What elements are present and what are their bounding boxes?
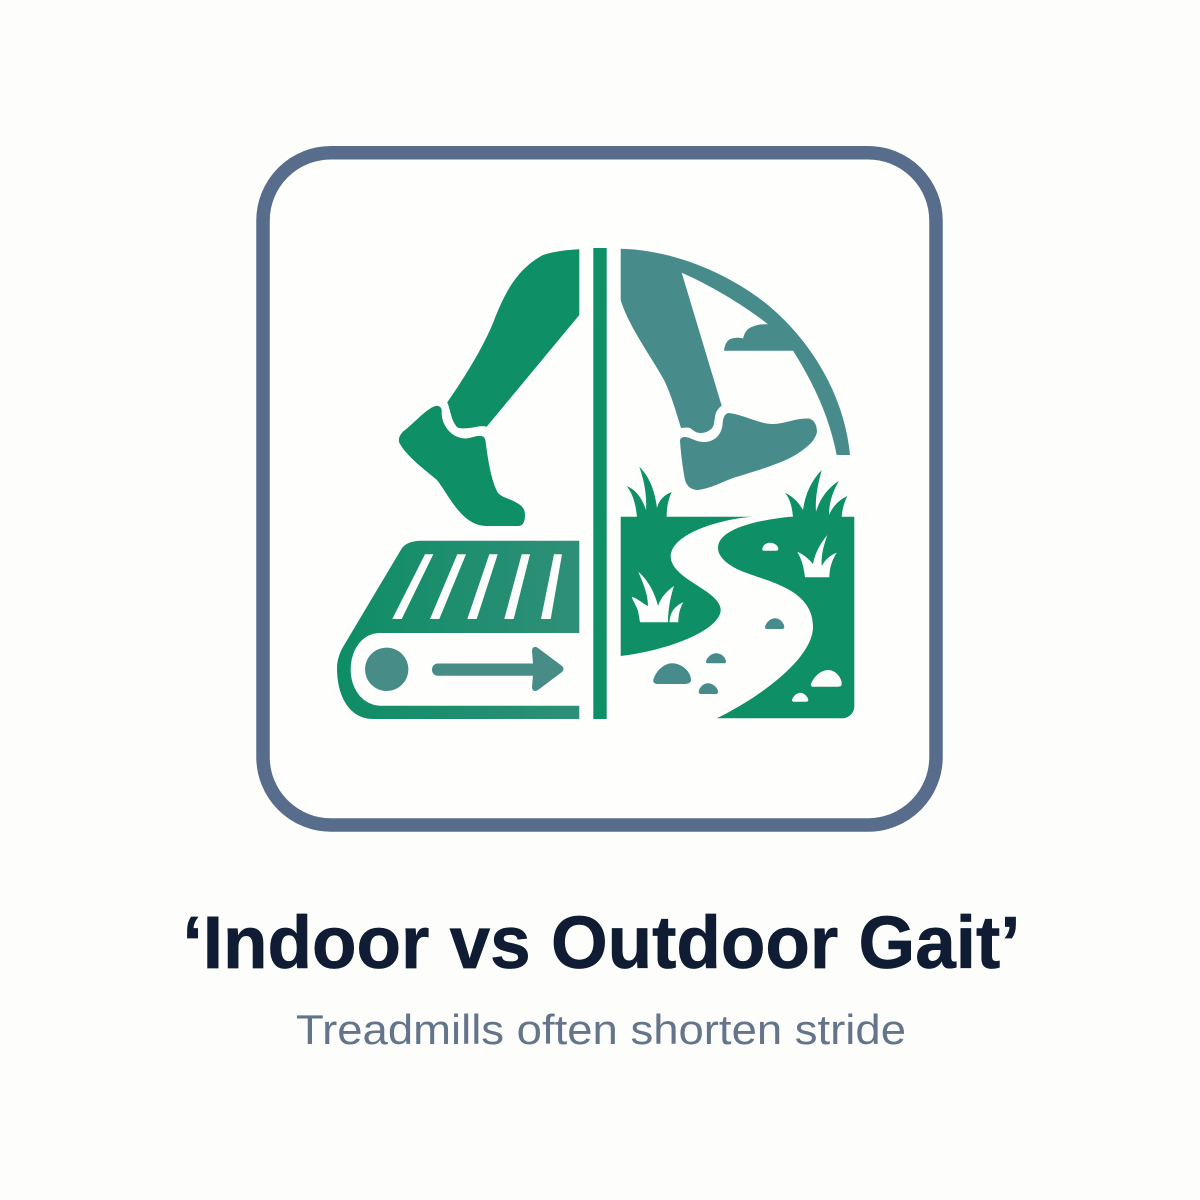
treadmill slats xyxy=(392,554,562,619)
teal stones xyxy=(653,618,784,694)
indoor foot xyxy=(399,406,525,526)
outdoor sky arc and leg xyxy=(621,249,850,455)
grass tuft top left xyxy=(627,467,672,518)
title: ‘Indoor vs Outdoor Gait’ xyxy=(182,901,1020,984)
treadmill roller xyxy=(365,648,408,691)
icon frame xyxy=(263,153,936,825)
white grass tuft left xyxy=(632,572,683,622)
outdoor foot xyxy=(680,413,817,490)
treadmill belt xyxy=(337,541,579,719)
subtitle: Treadmills often shorten stride xyxy=(296,1006,906,1053)
centre divider xyxy=(593,248,607,719)
grass tuft top right xyxy=(785,470,847,518)
white grass tuft right xyxy=(797,535,837,577)
indoor leg xyxy=(447,249,579,428)
right grass block xyxy=(717,517,854,718)
icon: indoor vs outdoor gait xyxy=(337,248,854,719)
left grass block xyxy=(621,517,752,656)
treadmill direction arrow xyxy=(432,647,564,691)
white stones xyxy=(762,543,842,702)
